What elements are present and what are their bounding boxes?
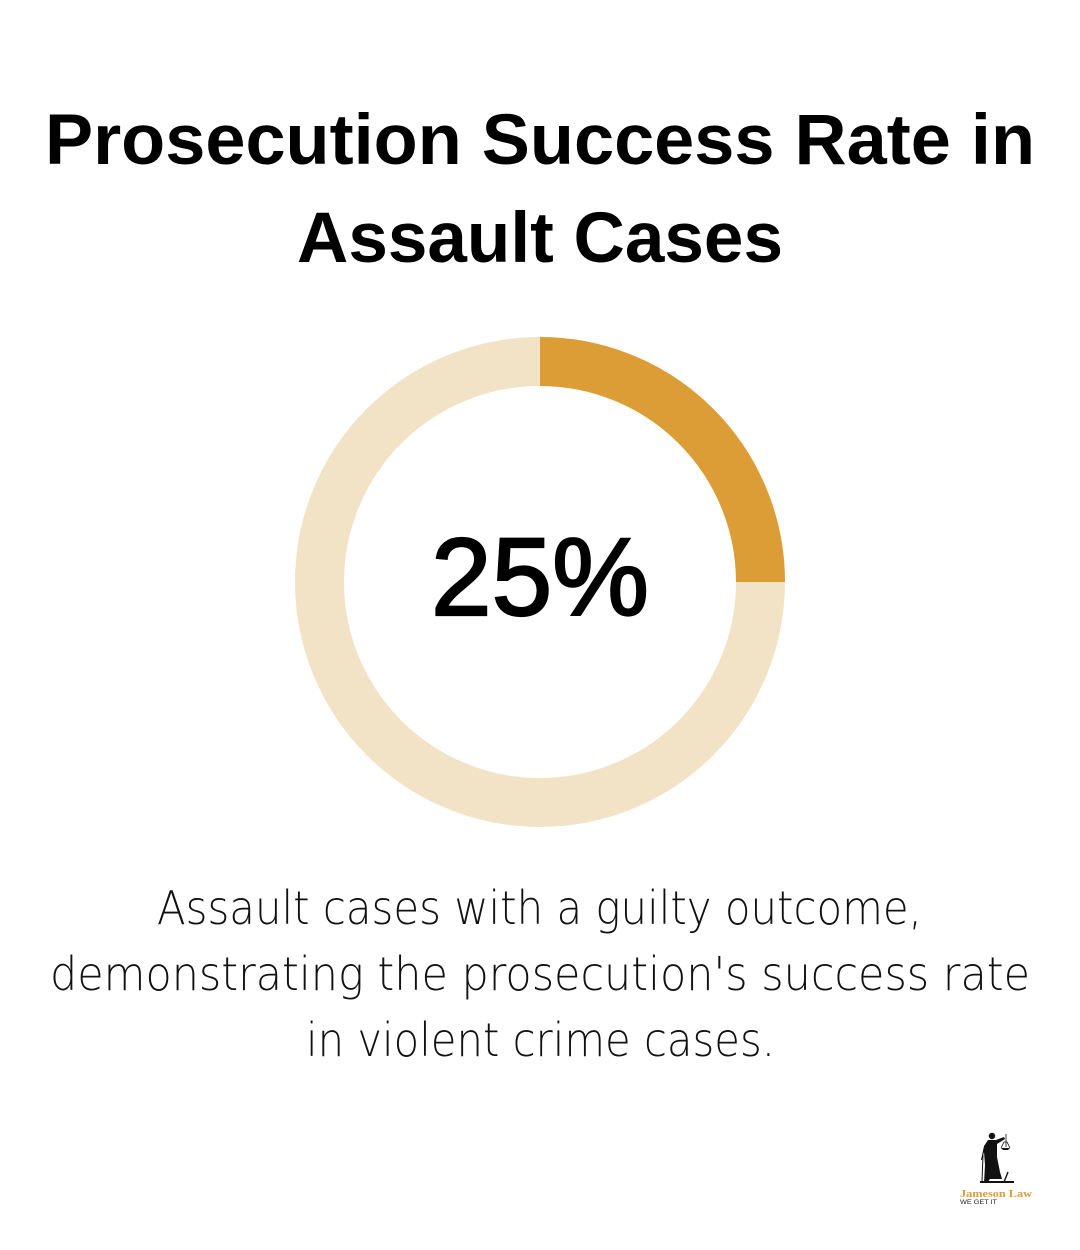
logo tagline: WE GET IT — [960, 1199, 997, 1206]
description text: in violent crime cases. — [306, 1013, 775, 1067]
title — [45, 101, 1035, 278]
description text: Assault cases with a guilty outcome, — [157, 881, 922, 935]
chart track — [320, 362, 760, 802]
logo name: Jameson Law — [960, 1189, 1032, 1200]
icon: lady justice — [980, 1133, 1014, 1183]
description text — [50, 881, 1030, 1067]
donut chart — [320, 362, 760, 802]
title: Assault Cases — [297, 199, 783, 278]
logo: Jameson Law — [960, 1133, 1032, 1206]
description text: demonstrating the prosecution's success rate — [50, 947, 1030, 1001]
title: Prosecution Success Rate in — [45, 101, 1035, 180]
chart segment: 25% — [540, 362, 760, 582]
percentage value: 25% — [431, 516, 649, 639]
